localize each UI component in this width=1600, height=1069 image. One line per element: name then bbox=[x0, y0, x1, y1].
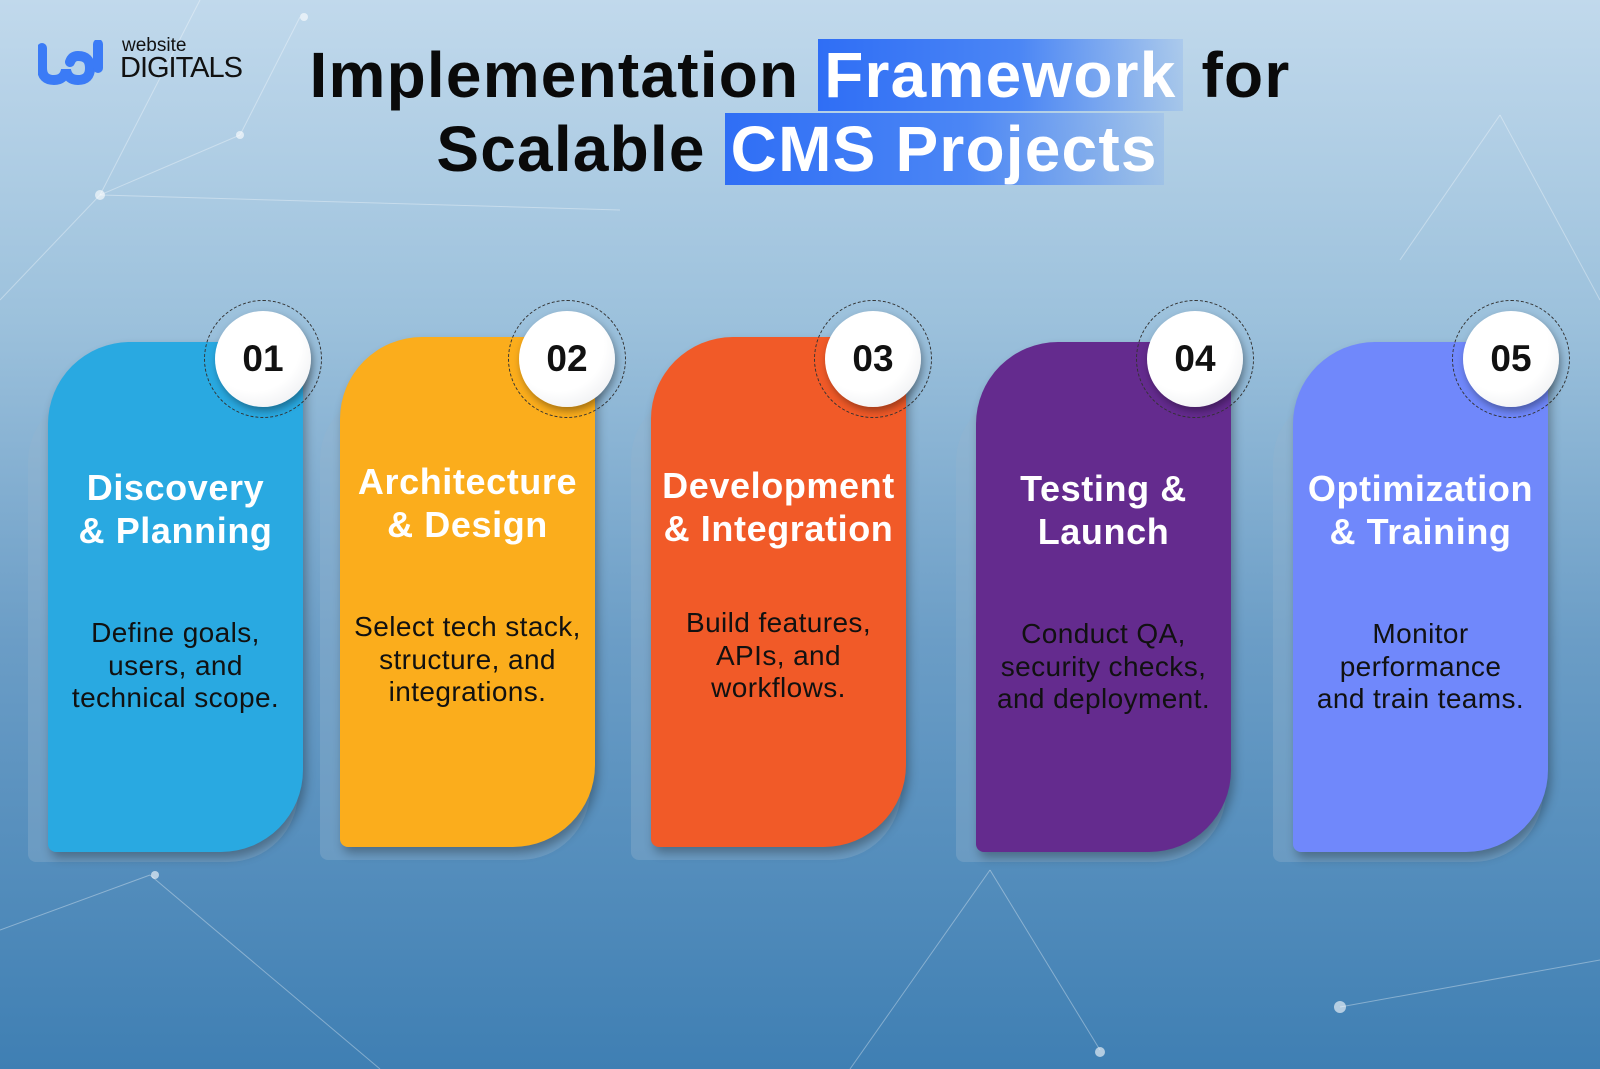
step 5: Optimization bbox=[1308, 468, 1533, 509]
step 5: Monitor bbox=[1372, 618, 1469, 649]
badge 03: 03 bbox=[852, 338, 894, 379]
step 2: & Design bbox=[387, 504, 548, 545]
step 4: Testing & bbox=[1020, 468, 1187, 509]
step 5: performance bbox=[1340, 650, 1501, 682]
badge 05 bbox=[1463, 311, 1559, 407]
badge 02: 02 bbox=[546, 338, 588, 379]
badge 04: 04 bbox=[1174, 338, 1216, 379]
logo bbox=[38, 35, 242, 85]
step 4: Launch bbox=[1038, 511, 1169, 552]
step 2: Architecture bbox=[358, 461, 577, 502]
step 2: integrations. bbox=[389, 676, 546, 707]
step 3: Development bbox=[662, 465, 895, 506]
step 4: and deployment. bbox=[997, 683, 1210, 714]
step 3: APIs, and bbox=[716, 640, 841, 670]
step 5: and train teams. bbox=[1317, 683, 1524, 714]
badge 01: 01 bbox=[242, 338, 284, 379]
badge 02 bbox=[519, 311, 615, 407]
step 2: structure, and bbox=[379, 644, 556, 674]
title: Implementation Framework for bbox=[310, 39, 1290, 111]
step 5 bbox=[1273, 300, 1570, 864]
step 3: workflows. bbox=[711, 672, 846, 703]
step 3: Build features, bbox=[686, 607, 871, 638]
step 1: users, and bbox=[108, 650, 243, 680]
step 1: & Planning bbox=[78, 510, 272, 551]
step 2: Select tech stack, bbox=[354, 611, 581, 642]
step 1: technical scope. bbox=[72, 682, 279, 713]
step 4: Conduct QA, bbox=[1021, 618, 1186, 649]
step 1 bbox=[28, 300, 322, 864]
step 3: & Integration bbox=[664, 508, 893, 549]
title: Scalable CMS Projects bbox=[436, 113, 1158, 185]
title bbox=[310, 39, 1290, 185]
step 1: Define goals, bbox=[91, 617, 260, 648]
badge 01 bbox=[215, 311, 311, 407]
badge 04 bbox=[1147, 311, 1243, 407]
step 2 bbox=[320, 300, 626, 860]
badge 05: 05 bbox=[1490, 338, 1532, 379]
step 4: security checks, bbox=[1001, 650, 1206, 682]
step 4 bbox=[956, 300, 1254, 864]
step 1: Discovery bbox=[87, 467, 264, 508]
logo: DIGITALS bbox=[120, 52, 242, 84]
step 5: & Training bbox=[1329, 511, 1512, 552]
badge 03 bbox=[825, 311, 921, 407]
step 3 bbox=[631, 300, 932, 860]
logo: website bbox=[122, 35, 186, 56]
